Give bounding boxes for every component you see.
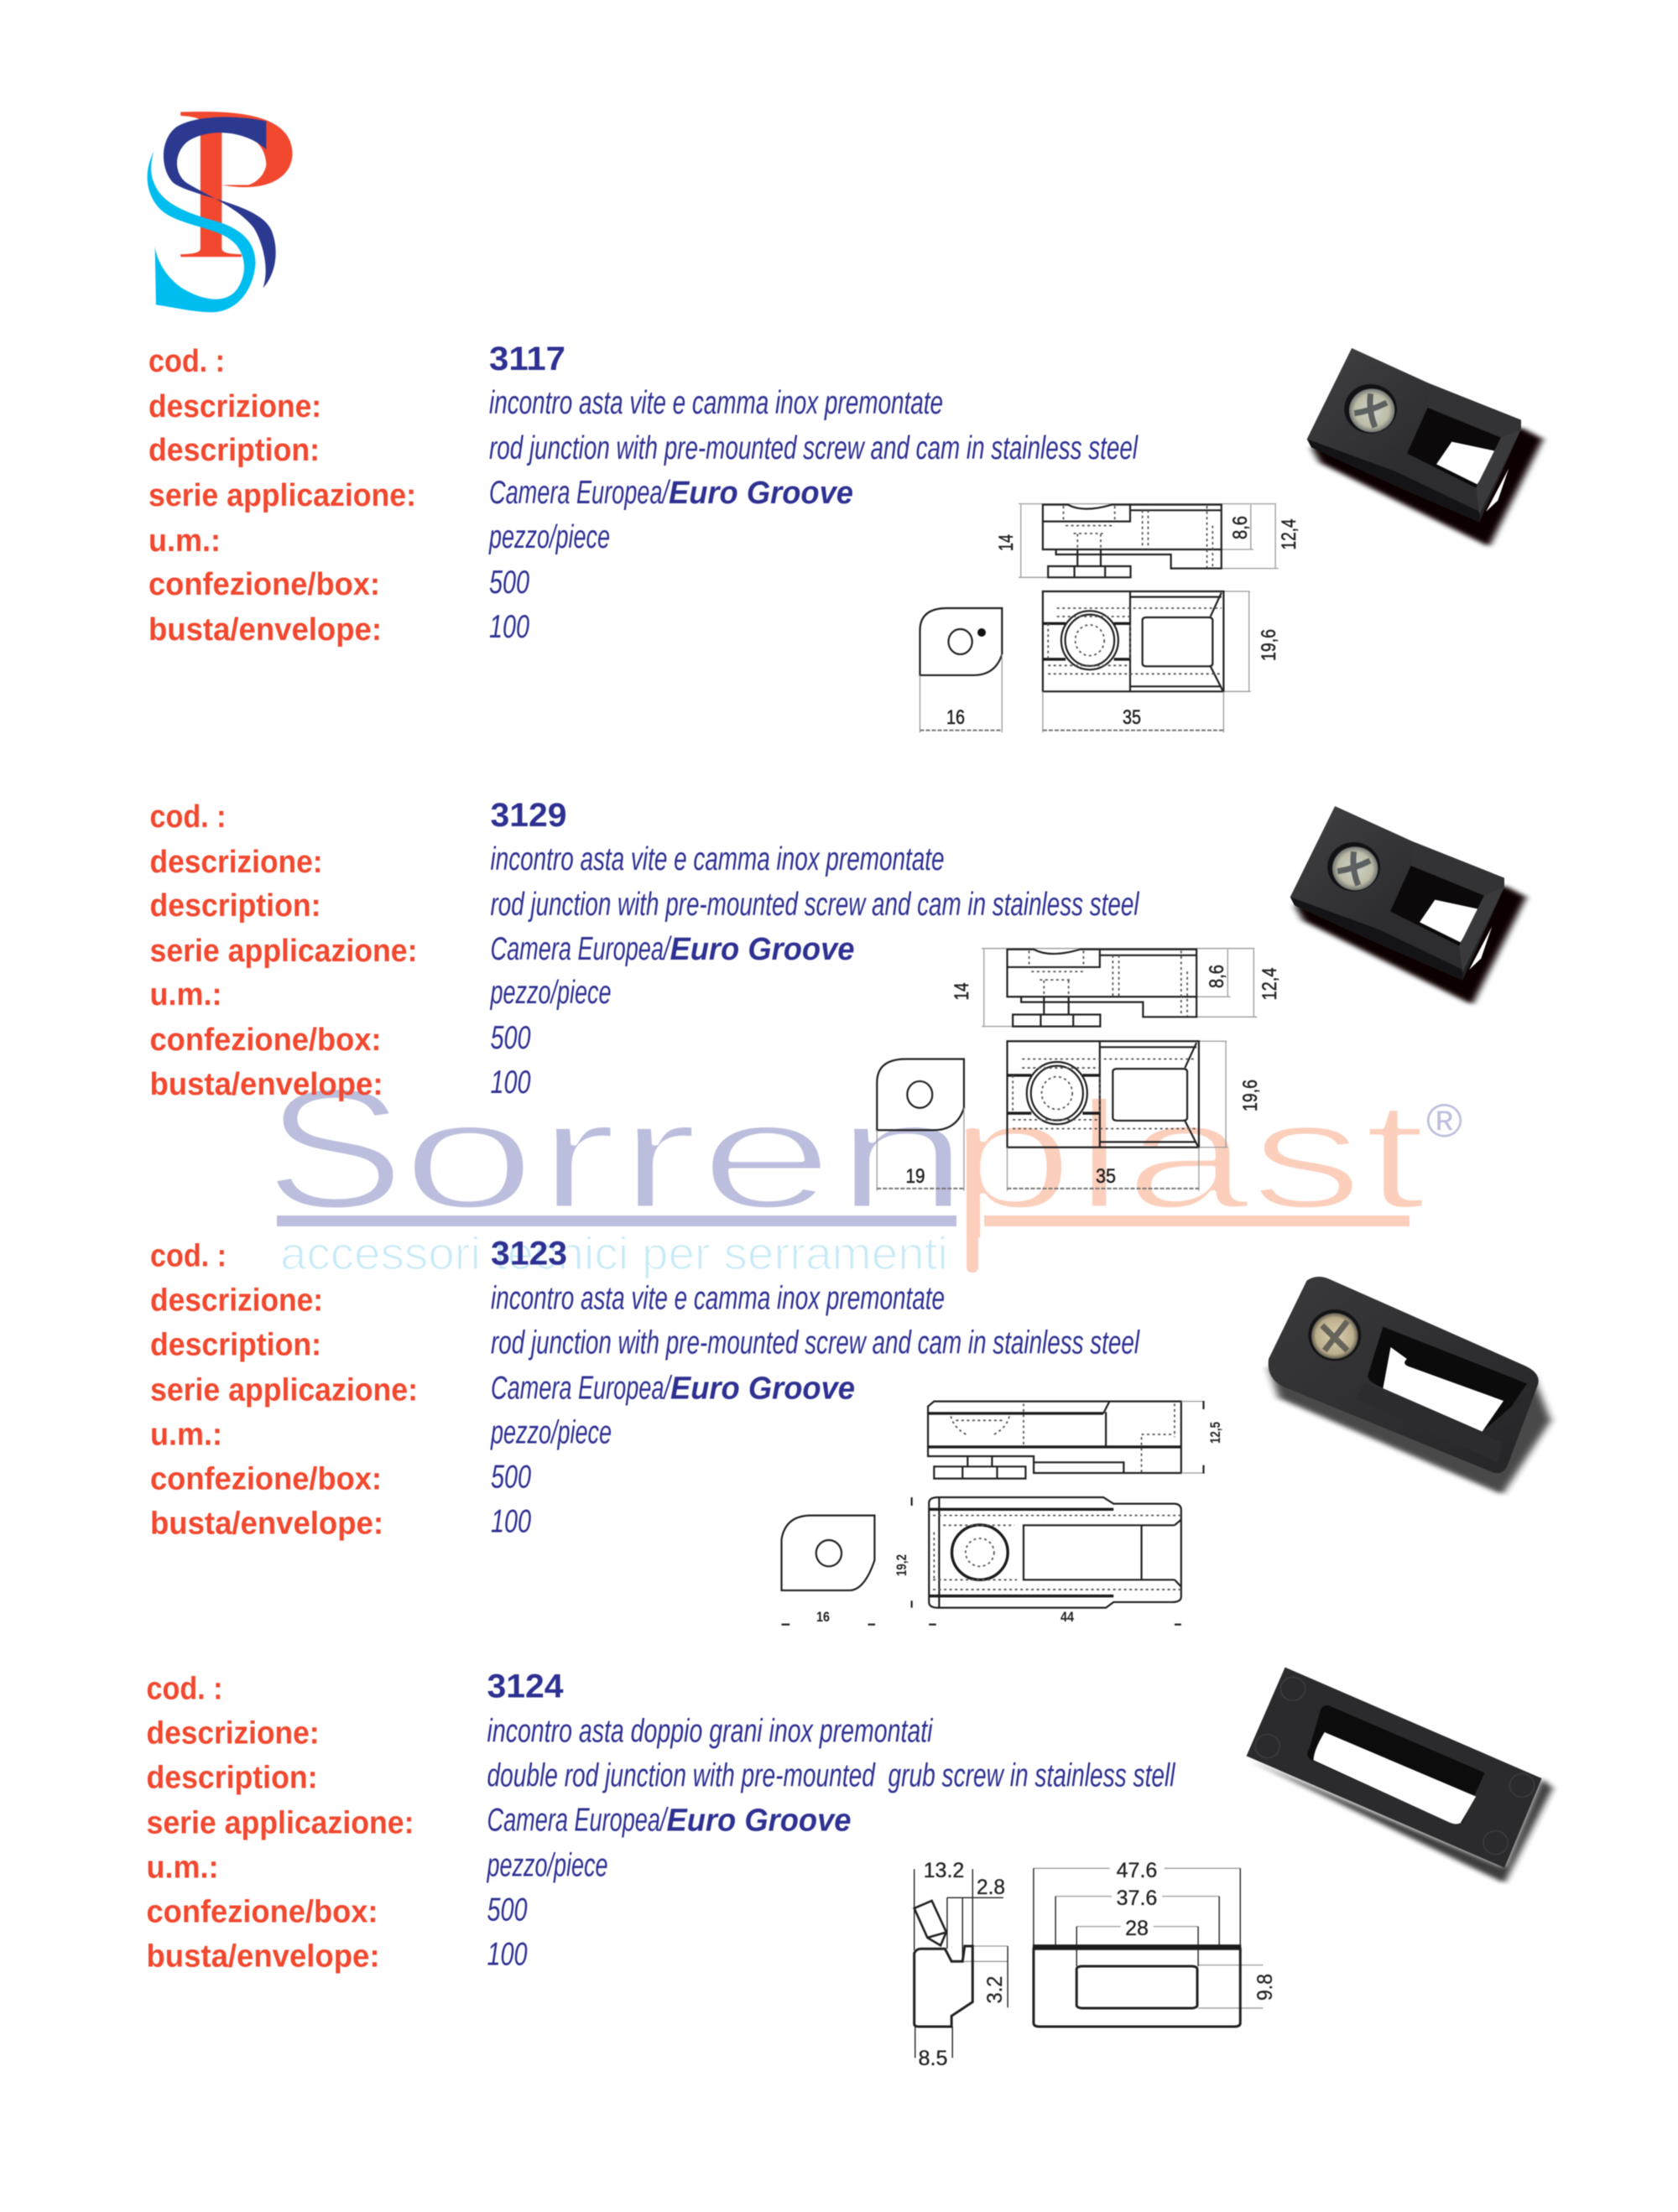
values 3123: rod junction with pre-mounted screw and cam in stainless steel	[491, 1325, 1140, 1361]
labels 3124: confezione/box:	[146, 1894, 378, 1929]
labels 3129: u.m.:	[149, 977, 221, 1012]
panel: product 3124 text	[146, 1668, 1175, 1975]
labels 3117: u.m.:	[149, 523, 221, 559]
values 3123	[490, 1235, 1140, 1540]
panel: product 3129 text	[149, 797, 1139, 1102]
technical drawing 3123	[782, 1401, 1223, 1625]
labels 3124: busta/envelope:	[146, 1939, 379, 1975]
values 3117: pezzo/piece	[488, 519, 610, 555]
product photo 3124	[1247, 1668, 1553, 1883]
panel: product 3123 text	[150, 1235, 1140, 1542]
watermark word orren: orren	[401, 1070, 970, 1241]
values 3117	[488, 341, 1139, 645]
values 3124: 500	[487, 1892, 528, 1928]
logo SP	[148, 112, 293, 312]
values 3117: incontro asta vite e camma inox premontate	[489, 385, 943, 421]
watermark registered mark: ®	[1426, 1094, 1462, 1147]
product photo 3123	[1269, 1277, 1550, 1495]
technical drawing 3129: 19	[906, 1165, 925, 1188]
labels 3117: descrizione:	[149, 389, 321, 424]
values 3117: 100	[489, 609, 529, 645]
values 3124	[487, 1668, 1175, 1973]
watermark: Sorrenplast	[264, 1053, 1462, 1279]
values 3129: 100	[490, 1064, 531, 1101]
technical drawing 3129: 14	[951, 983, 973, 1000]
labels 3124: cod. :	[146, 1671, 223, 1706]
values 3117: 500	[489, 565, 529, 601]
labels 3123: serie applicazione:	[150, 1372, 418, 1408]
labels 3123: description:	[150, 1327, 321, 1362]
technical drawing 3124: 8.5	[918, 2047, 948, 2070]
values 3129: 500	[490, 1020, 531, 1056]
values 3124: pezzo/piece	[487, 1847, 607, 1884]
labels 3117: description:	[149, 433, 320, 468]
values 3123: Euro Groove	[670, 1371, 855, 1406]
values 3117: 3117	[489, 341, 565, 377]
technical drawing 3129: 8,6	[1206, 965, 1228, 988]
values 3117: Euro Groove	[669, 476, 853, 511]
technical drawing 3117: 16	[946, 706, 965, 729]
watermark underline orange	[984, 1215, 1410, 1226]
technical drawing 3124	[915, 1859, 1277, 2070]
values 3129	[490, 797, 1139, 1101]
watermark word plast: plast	[948, 1070, 1427, 1241]
technical drawing 3124: 13.2	[924, 1859, 964, 1882]
technical drawing 3117: 35	[1123, 706, 1141, 729]
technical drawing 3123: 16	[816, 1609, 830, 1625]
labels 3129	[149, 799, 418, 1102]
values 3124: double rod junction with pre-mounted grub screw in stainless stell	[487, 1758, 1175, 1793]
technical drawing 3117	[920, 504, 1300, 732]
product photo 3129	[1290, 806, 1526, 1005]
values 3124: Camera Europea/	[487, 1802, 669, 1839]
technical drawing 3117: 8,6	[1229, 516, 1252, 539]
values 3124: 100	[487, 1936, 528, 1973]
labels 3123: confezione/box:	[150, 1461, 382, 1496]
values 3129: Camera Europea/	[490, 931, 672, 967]
labels 3129: confezione/box:	[149, 1023, 381, 1058]
labels 3117: serie applicazione:	[149, 478, 416, 513]
watermark underline blue	[277, 1215, 956, 1226]
technical drawing 3117: 19,6	[1258, 629, 1280, 661]
technical drawing 3124: 2.8	[977, 1876, 1005, 1899]
technical drawing 3124: 47.6	[1117, 1859, 1157, 1882]
labels 3129: descrizione:	[149, 845, 322, 880]
labels 3124: u.m.:	[146, 1850, 218, 1886]
labels 3123: cod. :	[150, 1238, 227, 1273]
values 3124: 3124	[487, 1668, 564, 1705]
technical drawing 3124: 3.2	[983, 1976, 1007, 2003]
labels 3123	[150, 1238, 418, 1542]
labels 3129: cod. :	[149, 799, 227, 835]
labels 3124: descrizione:	[146, 1716, 319, 1751]
labels 3124: description:	[146, 1760, 317, 1795]
panel: product 3117 text	[149, 341, 1139, 648]
technical drawing 3124: 28	[1125, 1917, 1149, 1940]
values 3123: incontro asta vite e camma inox premontate	[491, 1280, 945, 1317]
labels 3123: u.m.:	[150, 1418, 222, 1453]
values 3117: rod junction with pre-mounted screw and cam in stainless steel	[489, 430, 1139, 466]
watermark word Sorren: S	[264, 1053, 405, 1245]
technical drawing 3123: 19,2	[894, 1554, 909, 1576]
technical drawing 3129: 12,4	[1258, 968, 1281, 1000]
labels 3117: cod. :	[149, 344, 225, 379]
side view dot	[977, 628, 986, 637]
labels 3124	[146, 1671, 414, 1975]
technical drawing 3124: 9.8	[1253, 1974, 1277, 2001]
technical drawing 3123: 44	[1060, 1609, 1074, 1625]
labels 3117: busta/envelope:	[149, 612, 382, 648]
values 3129: rod junction with pre-mounted screw and cam in stainless steel	[490, 887, 1139, 923]
values 3123: 500	[491, 1460, 531, 1495]
values 3123: 3123	[491, 1235, 567, 1272]
technical drawing 3129: 19,6	[1239, 1080, 1262, 1111]
labels 3117	[149, 344, 416, 648]
labels 3117: confezione/box:	[149, 567, 380, 602]
values 3124: incontro asta doppio grani inox premontati	[487, 1713, 933, 1750]
technical drawing 3117: 14	[995, 534, 1018, 551]
technical drawing 3129: 35	[1096, 1165, 1116, 1188]
values 3129: incontro asta vite e camma inox premontate	[490, 841, 945, 877]
labels 3123: descrizione:	[150, 1283, 323, 1319]
technical drawing 3129	[877, 949, 1281, 1191]
technical drawing 3124: 37.6	[1117, 1887, 1157, 1910]
values 3129: 3129	[490, 797, 567, 834]
values 3129: Euro Groove	[670, 932, 854, 967]
technical drawing 3117: 12,4	[1278, 518, 1300, 550]
product photo 3117	[1307, 348, 1543, 547]
values 3123: pezzo/piece	[490, 1414, 612, 1451]
watermark tagline: accessori tecnici per serramenti	[280, 1227, 948, 1279]
labels 3129: serie applicazione:	[149, 934, 418, 969]
technical drawing 3123: 12,5	[1207, 1422, 1223, 1444]
values 3129: pezzo/piece	[490, 975, 611, 1011]
labels 3123: busta/envelope:	[150, 1507, 383, 1542]
labels 3129: busta/envelope:	[149, 1067, 383, 1102]
values 3123: 100	[491, 1503, 531, 1540]
watermark p descender	[967, 1128, 978, 1273]
values 3124: Euro Groove	[666, 1803, 851, 1839]
values 3117: Camera Europea/	[489, 475, 671, 511]
labels 3129: description:	[149, 888, 320, 924]
values 3123: Camera Europea/	[491, 1371, 673, 1406]
labels 3124: serie applicazione:	[146, 1805, 414, 1840]
